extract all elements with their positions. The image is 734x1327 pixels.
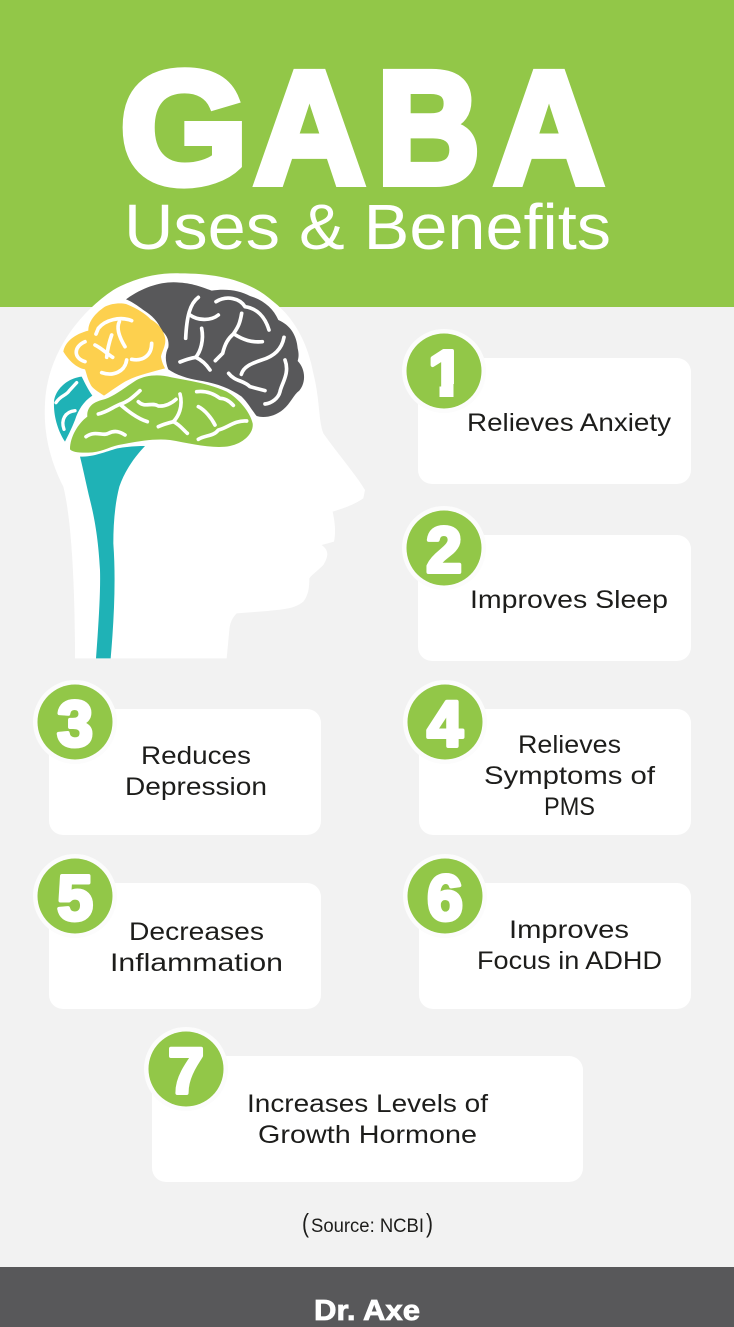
footer band (0, 1267, 734, 1327)
head silhouette (45, 273, 365, 658)
benefit card 3: 3 (57, 688, 93, 760)
benefit card 4: Relieves (518, 731, 621, 759)
illustration: head with brain (45, 273, 365, 658)
title: A (494, 38, 604, 217)
brain: dark lobe folds (180, 297, 287, 404)
benefit card 6: Focus in ADHD (477, 947, 662, 975)
benefit card 4 (403, 680, 691, 835)
title (120, 38, 604, 217)
benefit card 1 (402, 329, 691, 484)
benefit card 6: 6 (427, 862, 463, 934)
brain: green temporal lobe (70, 375, 253, 453)
source note: ( (302, 1208, 309, 1238)
benefit card 5: Decreases (129, 918, 264, 946)
benefit card 1: Relieves Anxiety (467, 409, 672, 437)
benefit card 2: 2 (426, 514, 462, 586)
brain: yellow lobe folds (76, 319, 152, 374)
title: A (254, 38, 365, 217)
brain: green lobe folds (86, 391, 247, 439)
benefit card 3: Reduces (141, 742, 251, 770)
brain: teal brain stem (80, 446, 145, 658)
source note (302, 1208, 433, 1238)
benefit card 5: Inflammation (110, 949, 283, 977)
benefit card 1: 1 (428, 337, 464, 409)
benefit card 7: Increases Levels of (247, 1090, 488, 1118)
benefit card 5: 5 (57, 862, 93, 934)
brain: occipital dark lobe (126, 282, 304, 417)
title: G (120, 38, 248, 217)
benefit card 3 (33, 680, 321, 835)
brain: cerebellum folds (56, 383, 77, 429)
benefit card 7: 7 (168, 1035, 204, 1107)
brain: yellow frontal lobe (63, 303, 165, 396)
benefit card 6: Improves (509, 916, 629, 944)
footer logo text: Dr. Axe (314, 1295, 420, 1327)
benefit card 4: PMS (544, 793, 595, 821)
title: B (377, 38, 480, 217)
header band (0, 0, 734, 307)
benefit card 4: Symptoms of (484, 762, 655, 790)
source note: ) (426, 1208, 433, 1238)
benefit card 7: Growth Hormone (258, 1121, 477, 1149)
benefit card 5 (33, 854, 321, 1009)
source note: Source: NCBI (311, 1216, 424, 1237)
benefit card 6 (403, 854, 691, 1009)
brain: teal cerebellum (54, 377, 92, 442)
benefit card 7 (144, 1027, 583, 1182)
benefit card 2 (402, 506, 691, 661)
benefit card 4: 4 (427, 688, 463, 760)
benefit card 3: Depression (125, 773, 267, 801)
benefit card 2: Improves Sleep (470, 586, 668, 614)
subtitle: Uses & Benefits (124, 191, 611, 263)
